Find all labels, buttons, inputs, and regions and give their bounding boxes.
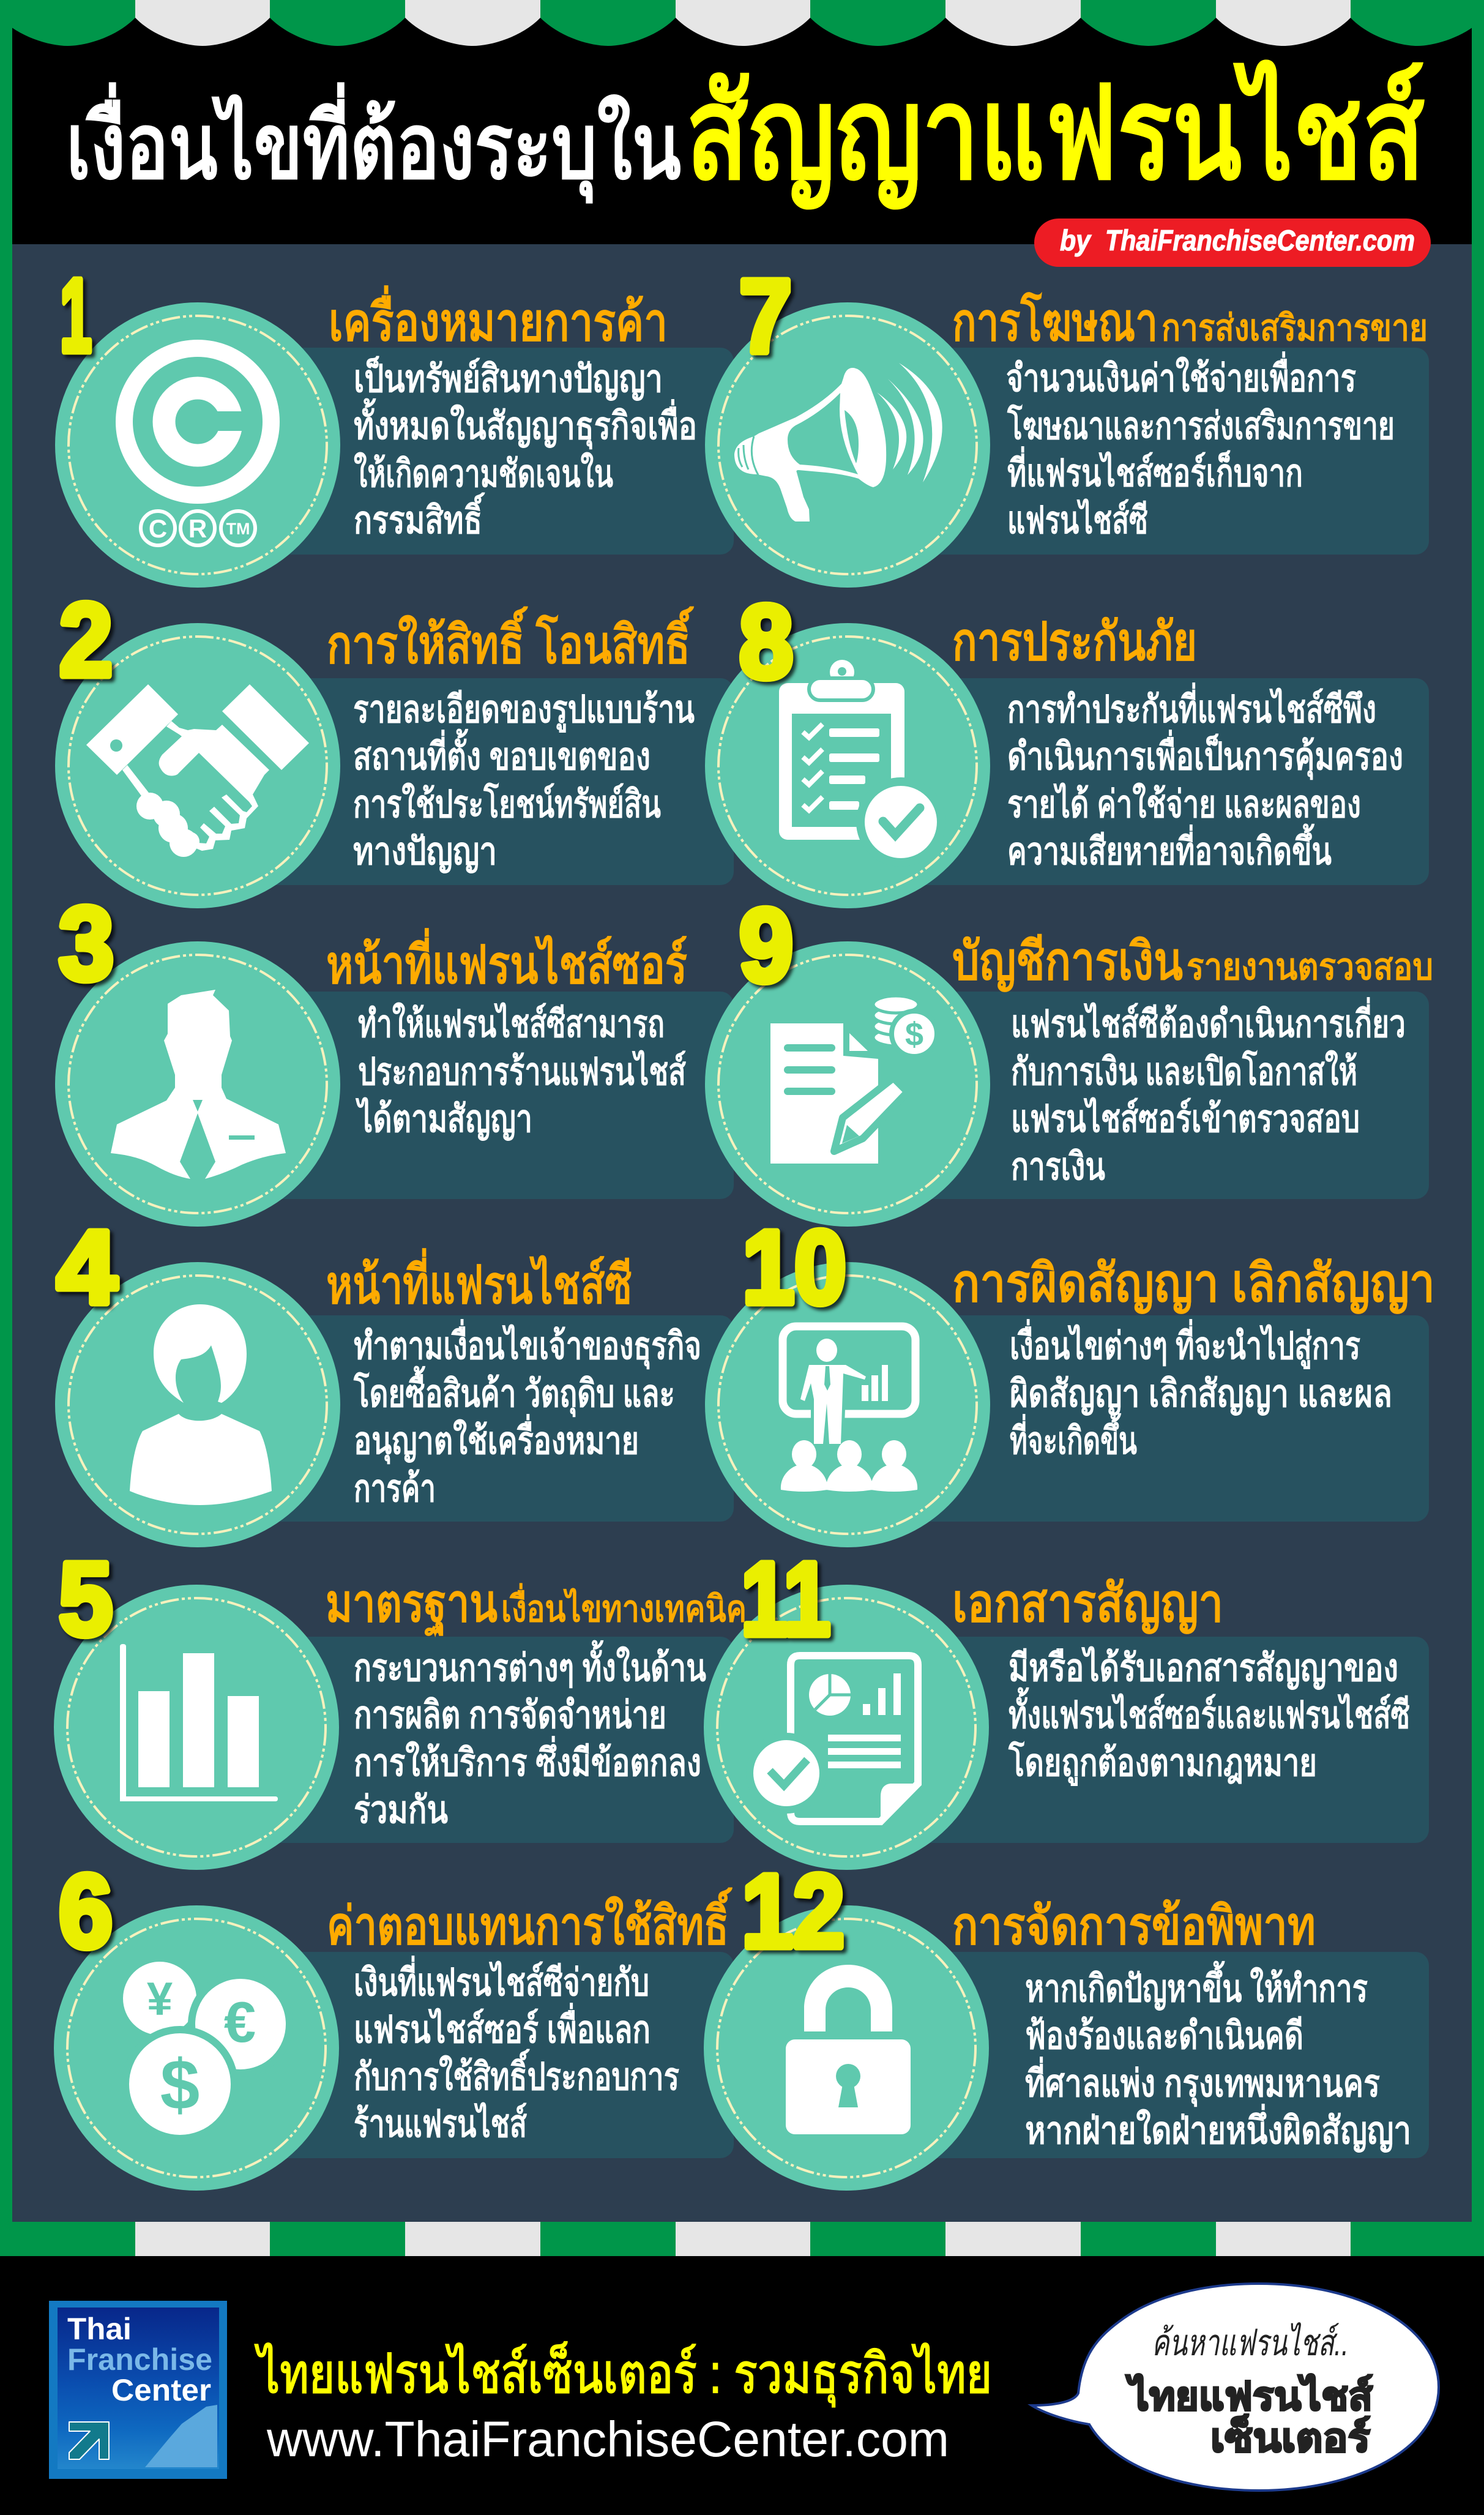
item 5: standards — [54, 1541, 747, 1870]
awning: green scallops — [0, 0, 1484, 46]
icon: presenter and audience — [781, 1326, 917, 1492]
bottom striped band — [0, 2222, 1484, 2256]
speech bubble: ค้นหาแฟรนไชส์.. — [1152, 2322, 1349, 2363]
icon: woman — [130, 1304, 272, 1505]
heading 9: บัญชีการเงิน — [952, 932, 1183, 993]
body text 8: รายได้ ค่าใช้จ่าย และผลของ — [1007, 782, 1361, 826]
number 2: 2 — [59, 582, 113, 698]
body text 5: การให้บริการ ซึ่งมีข้อตกลง — [354, 1736, 701, 1784]
number 6: 6 — [59, 1853, 113, 1970]
awning: white scallops — [135, 0, 1351, 46]
number 10: 10 — [742, 1209, 846, 1326]
item 4: franchisee duties — [55, 1209, 734, 1547]
main dark panel — [12, 244, 1472, 2222]
number 5: 5 — [59, 1541, 113, 1657]
item 1: trademark — [55, 258, 734, 588]
heading 1: เครื่องหมายการค้า — [329, 285, 668, 352]
body text 9: แฟรนไชส์ซอร์เข้าตรวจสอบ — [1011, 1097, 1360, 1140]
body text 9: กับการเงิน และเปิดโอกาสให้ — [1011, 1049, 1357, 1093]
body text 2: สถานที่ตั้ง ขอบเขตของ — [353, 728, 651, 778]
heading 11: เอกสารสัญญา — [952, 1574, 1223, 1635]
number 8: 8 — [739, 584, 793, 700]
body text 9: การเงิน — [1011, 1146, 1105, 1188]
heading 5: เงื่อนไขทางเทคนิค — [501, 1583, 747, 1629]
red byline pill: by — [1060, 224, 1092, 256]
body text 5 — [354, 1640, 706, 1831]
body text 6: เงินที่แฟรนไชส์ซีจ่ายกับ — [354, 1956, 649, 2004]
body text 3 — [355, 1002, 686, 1141]
icon: coins — [123, 1962, 289, 2139]
body text 1 — [354, 356, 697, 542]
icon: coins: $ — [160, 2045, 199, 2124]
body text 12: ฟ้องร้องและดำเนินคดี — [1025, 2015, 1303, 2057]
number 12: 12 — [742, 1853, 845, 1970]
speech bubble: เซ็นเตอร์ — [1210, 2415, 1370, 2460]
icon: copyright — [124, 348, 271, 545]
body text 3: ประกอบการร้านแฟรนไชส์ — [358, 1050, 686, 1093]
body text 5: กระบวนการต่างๆ ทั้งในด้าน — [354, 1640, 706, 1689]
item 10: breach of contract — [705, 1209, 1435, 1547]
body text 11 — [1008, 1646, 1410, 1786]
body text 11: มีหรือได้รับเอกสารสัญญาของ — [1009, 1646, 1398, 1690]
body text 3: ทำให้แฟรนไชส์ซีสามารถ — [358, 1002, 665, 1045]
speech bubble — [1032, 2284, 1439, 2491]
heading 7 — [952, 291, 1428, 352]
item 12: dispute resolution — [704, 1853, 1429, 2191]
number 7: 7 — [739, 258, 792, 375]
body text 8 — [1007, 682, 1403, 873]
icon: arrow — [69, 2422, 109, 2459]
heading 7: การโฆษณา — [952, 291, 1158, 352]
icon: document, coins and pencil — [770, 996, 937, 1164]
body text 12: หากฝ่ายใดฝ่ายหนึ่งผิดสัญญา — [1025, 2104, 1411, 2153]
body text 2 — [353, 689, 695, 873]
icon: copyright: C — [149, 514, 167, 543]
footer text: website: www.ThaiFranchiseCenter.com — [266, 2412, 949, 2467]
body text 12: ที่ศาลแพ่ง กรุงเทพมหานคร — [1025, 2057, 1380, 2107]
red byline pill: ThaiFranchiseCenter.com — [1105, 224, 1415, 256]
body text 12 — [1025, 1960, 1411, 2153]
body text 6 — [354, 1956, 679, 2145]
body text 8: ความเสียหายที่อาจเกิดขึ้น — [1007, 823, 1332, 873]
item 11: contract documents — [704, 1541, 1429, 1870]
icon: padlock — [786, 1965, 911, 2134]
icon: document with check — [750, 1656, 922, 1824]
body text 10: ผิดสัญญา เลิกสัญญา และผล — [1010, 1373, 1392, 1416]
number 9: 9 — [739, 888, 793, 1004]
logo: Thai Franchise Center — [49, 2301, 227, 2479]
body text 9 — [1011, 997, 1406, 1188]
body text 3: ได้ตามสัญญา — [355, 1097, 532, 1141]
body text 10 — [1010, 1319, 1392, 1462]
logo: Thai Franchise Center: Franchise — [67, 2342, 212, 2377]
heading 9 — [952, 932, 1433, 993]
body text 7: จำนวนเงินค่าใช้จ่ายเพื่อการ — [1006, 351, 1356, 400]
title — [66, 59, 1425, 210]
heading 5 — [326, 1574, 747, 1638]
body text 2: การใช้ประโยชน์ทรัพย์สิน — [353, 782, 661, 826]
heading 2: การให้สิทธิ์ โอนสิทธิ์ — [327, 606, 694, 675]
item 6: royalties — [54, 1853, 734, 2191]
icon: bar chart — [120, 1644, 278, 1801]
heading 3: หน้าที่แฟรนไชส์ซอร์ — [326, 927, 687, 995]
body text 2: รายละเอียดของรูปแบบร้าน — [353, 689, 695, 733]
body text 7: ที่แฟรนไชส์ซอร์เก็บจาก — [1007, 446, 1303, 495]
heading 12: การจัดการข้อพิพาท — [952, 1897, 1316, 1956]
number 3: 3 — [59, 886, 114, 1002]
body text 1: กรรมสิทธิ์ — [354, 492, 485, 542]
icon: coins: ¥ — [147, 1973, 173, 2025]
number 1: 1 — [60, 258, 92, 374]
body text 10: ที่จะเกิดขึ้น — [1010, 1413, 1137, 1462]
body text 4: ทำตามเงื่อนไขเจ้าของธุรกิจ — [354, 1319, 701, 1369]
body text 4: โดยซื้อสินค้า วัตถุดิบ และ — [353, 1366, 675, 1417]
item 8: insurance — [705, 584, 1429, 908]
item 3: franchisor duties — [55, 886, 734, 1227]
body text 2: ทางปัญญา — [353, 831, 497, 873]
body text 4 — [353, 1319, 701, 1510]
body text 1: ให้เกิดความชัดเจนใน — [354, 452, 613, 495]
heading 8: การประกันภัย — [952, 613, 1197, 671]
icon: handshake — [86, 684, 309, 857]
speech bubble: ไทยแฟรนไชส์ — [1125, 2374, 1373, 2418]
footer text: yellow Thai name: ไทยแฟรนไชส์เซ็นเตอร์ : รวมธุรกิจไทย — [255, 2341, 992, 2407]
icon: megaphone — [734, 363, 942, 521]
body text 8: การทำประกันที่แฟรนไชส์ซีพึง — [1007, 682, 1376, 731]
logo: Thai Franchise Center: Thai — [67, 2312, 132, 2346]
red byline pill — [1034, 219, 1431, 267]
body text 6: แฟรนไชส์ซอร์ เพื่อแลก — [354, 2003, 651, 2051]
heading 5: มาตรฐาน — [326, 1574, 498, 1638]
body text 5: การผลิต การจัดจำหน่าย — [354, 1694, 666, 1736]
icon: copyright: R — [188, 514, 207, 543]
body text 4: อนุญาตใช้เครื่องหมาย — [354, 1414, 639, 1464]
body text 7 — [1006, 351, 1395, 542]
body text 6: กับการใช้สิทธิ์ประกอบการ — [354, 2049, 679, 2098]
body text 6: ร้านแฟรนไชส์ — [354, 2102, 527, 2145]
body text 5: ร่วมกัน — [354, 1789, 448, 1831]
item 7: advertising — [705, 258, 1429, 588]
heading 7: การส่งเสริมการขาย — [1161, 307, 1428, 348]
icon: clipboard — [779, 660, 941, 862]
logo: Thai Franchise Center: Center — [111, 2373, 211, 2407]
icon: document, coins and pencil: $ — [905, 1016, 923, 1053]
icon: copyright: TM — [226, 520, 250, 538]
body text 7: แฟรนไชส์ซี — [1007, 498, 1148, 542]
body text 11: โดยถูกต้องตามกฎหมาย — [1008, 1740, 1317, 1786]
heading 6: ค่าตอบแทนการใช้สิทธิ์ — [327, 1887, 733, 1956]
icon: man in suit — [111, 990, 286, 1179]
item 2: licensing — [55, 582, 734, 908]
title: เงื่อนไขที่ต้องระบุใน — [66, 82, 681, 204]
number 4: 4 — [57, 1209, 117, 1326]
number 11: 11 — [741, 1541, 830, 1657]
item 9: accounting — [705, 888, 1433, 1227]
body text 4: การค้า — [354, 1468, 436, 1510]
heading 4: หน้าที่แฟรนไชส์ซี — [326, 1247, 632, 1315]
body text 1: เป็นทรัพย์สินทางปัญญา — [354, 356, 663, 401]
icon: coins: € — [224, 1990, 256, 2054]
body text 12: หากเกิดปัญหาขึ้น ให้ทำการ — [1025, 1960, 1368, 2011]
heading 9: รายงานตรวจสอบ — [1187, 946, 1433, 987]
body text 1: ทั้งหมดในสัญญาธุรกิจเพื่อ — [354, 398, 697, 449]
body text 10: เงื่อนไขต่างๆ ที่จะนำไปสู่การ — [1010, 1319, 1360, 1369]
